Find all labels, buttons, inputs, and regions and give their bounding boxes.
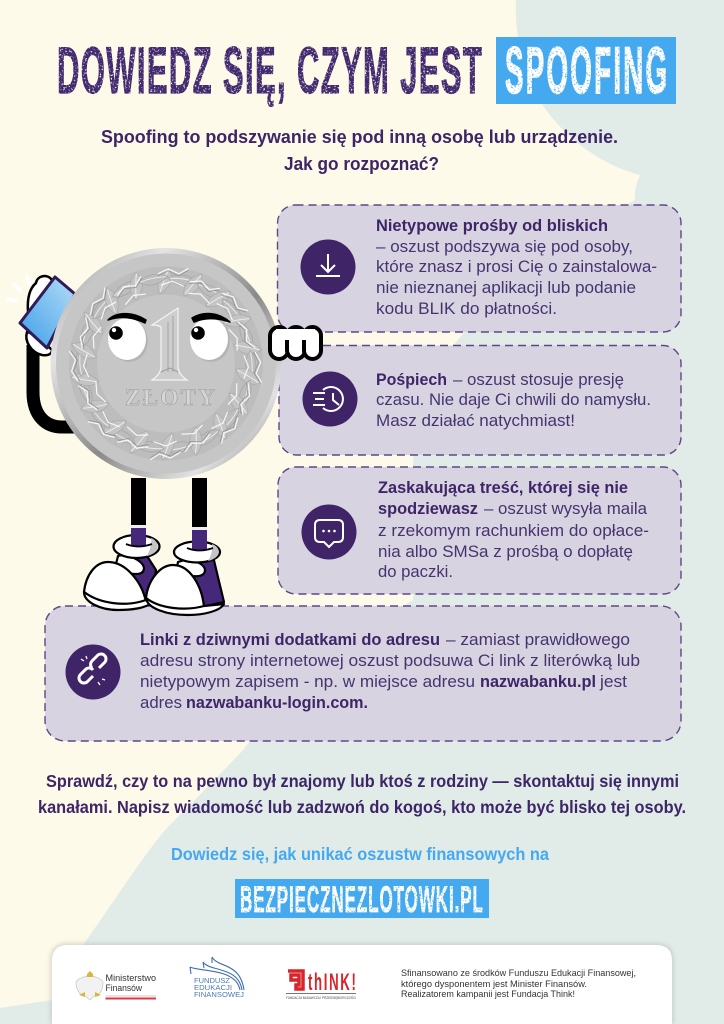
text: strange links [140,631,640,712]
panel: strange links [45,606,681,741]
text: unusual requests: kodu BLIK do płatności. [376,300,557,318]
shoe toe [84,562,146,605]
text: verify advice [38,771,686,817]
text: urgency: Masz działać natychmiast! [376,412,575,430]
icon: download [300,240,356,294]
logo: Ministry of Finance [76,971,156,1000]
text: unusual requests: – oszust podszywa się pod osoby, [376,238,633,256]
logo: Ministry of Finance: Finansów [106,983,142,994]
text: strange links: adres [140,694,182,712]
text: strange links: nietypowym zapisem - np. w miejsce adresu [140,673,475,691]
title [57,33,676,107]
logo: Ministry of Finance: Ministerstwo [106,973,156,984]
inner coin field [104,302,228,426]
coin text ZŁOTY: ZŁOTY [125,385,215,410]
text: unusual requests: które znasz i prosi Cię o zainstalowa- [376,258,657,276]
icon: fast clock [302,372,358,426]
text: strange links: nazwabanku.pl [480,673,596,691]
footer funding text [401,968,636,999]
text: urgency: – oszust stosuje presję [453,371,624,389]
right foot [146,542,224,615]
title: first part: DOWIEDZ SIĘ, CZYM JEST [57,33,482,107]
text: urgency: czasu. Nie daje Ci chwili do namysłu. [376,391,651,409]
text: unusual requests [376,217,657,318]
footer funding text: Sfinansowano ze środków Funduszu Edukacji Finansowej, [401,968,636,978]
logo: Think foundation: thINK! [308,969,356,996]
footer panel [50,943,674,1024]
coin body [50,248,282,479]
coin wreath [69,266,263,460]
text: surprising content: do paczki. [378,563,453,581]
shoe sole [146,598,224,615]
shoe toe [146,565,204,610]
text: surprising content: Zaskakująca treść, której się nie [378,479,628,497]
logo: Financial Education Fund: FUNDUSZ [194,976,230,985]
text: strange links: jest [599,673,627,691]
right leg [187,478,213,550]
text: surprising content: nia albo SMSa z prośbą o dopłatę [378,543,633,561]
text: strange links: Linki z dziwnymi dodatkami do adresu [140,631,440,649]
icon: broken link [66,644,120,700]
logo: Financial Education Fund [190,957,244,999]
text: unusual requests: Nietypowe prośby od bliskich [376,217,608,235]
left leg [126,478,152,546]
subtitle: Jak go rozpoznać? [284,153,439,174]
left eyebrow [108,314,146,323]
sock [115,555,144,574]
coin numeral 1 [152,308,187,380]
cuff [174,542,220,562]
logo: Financial Education Fund: EDUKACJI [194,983,232,992]
panel: surprising content [278,467,681,594]
left eye [108,318,148,362]
text: surprising content: – oszust wysyła maila [484,500,648,518]
icon: phone [20,277,75,348]
shoe sole [84,592,151,610]
panel: unusual requests [278,205,681,332]
website badge: BEZPIECZNEZLOTOWKI.PL [240,880,483,921]
footer funding text: którego dysponentem jest Minister Finansów. [401,979,587,989]
subtitle [101,126,618,174]
right hand [270,327,321,359]
logo: Think foundation [286,969,356,1000]
text: verify advice: Sprawdź, czy to na pewno był znajomy lub ktoś z rodziny — skontaktuj się innymi [46,771,679,791]
text: strange links: adresu strony internetowej oszust podsuwa Ci link z literówką lub [140,652,640,670]
logo: Financial Education Fund: FINANSOWEJ [194,990,244,999]
text: urgency [376,371,651,430]
text: learn more: Dowiedz się, jak unikać oszustw finansowych na [171,844,549,864]
sock [176,560,205,576]
panel: urgency [279,346,681,455]
left foot [84,535,160,610]
icon: sparkle lines by phone [8,277,29,301]
text: verify advice: kanałami. Napisz wiadomość lub zadzwoń do kogoś, kto może być blisko tej osoby. [38,797,686,817]
cuff [114,535,160,558]
arm holding phone [33,345,74,427]
text: strange links: – zamiast prawidłowego [446,631,630,649]
mascot: coin character [8,248,321,615]
hand behind phone [26,276,52,355]
subtitle: Spoofing to podszywanie się pod inną osobę lub urządzenie. [101,126,618,147]
text: surprising content: spodziewasz [378,500,478,518]
text: urgency: Pośpiech [376,371,447,389]
text: unusual requests: nie nieznanej aplikacji lub podanie [376,279,636,297]
text: surprising content [378,479,649,581]
footer funding text: Realizatorem kampanii jest Fundacja Think! [401,989,575,999]
right eyebrow [192,313,230,322]
shoe upper [128,552,156,603]
shoe upper [190,552,224,607]
text: strange links: nazwabanku-login.com. [186,694,368,712]
icon: chat bubble [302,504,356,560]
title: highlighted word box: SPOOFING [505,33,667,107]
right eye [190,318,230,362]
logo: Think foundation: FUNDACJA BADAWCZA I PRZEDSIĘBIORCZOŚCI [286,995,356,1000]
text: surprising content: z rzekomym rachunkiem do opłace- [378,522,649,540]
icon: eagle [76,971,103,1000]
